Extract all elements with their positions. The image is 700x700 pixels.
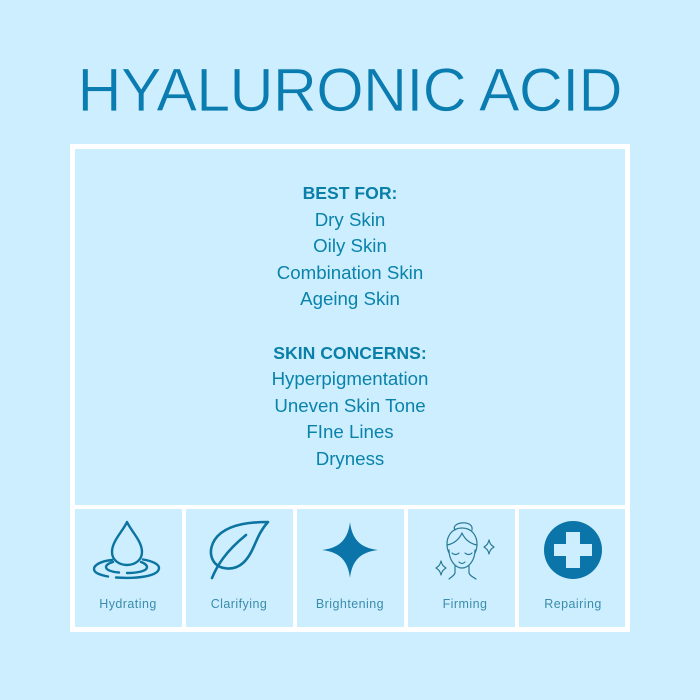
title: HYALURONIC ACID: [78, 56, 622, 124]
text block: best for: Dry Skin: [315, 208, 385, 230]
panel: main frame: [70, 144, 630, 632]
text block: best for: [277, 183, 423, 309]
text block: skin concerns: Dryness: [316, 448, 384, 468]
text block: skin concerns: FIne Lines: [306, 421, 394, 442]
text block: skin concerns: SKIN CONCERNS:: [273, 342, 427, 362]
label: brightening: Brightening: [316, 597, 384, 611]
text block: skin concerns: Uneven Skin Tone: [274, 394, 426, 416]
text block: skin concerns: Hyperpigmentation: [272, 368, 428, 389]
text block: best for: Combination Skin: [277, 262, 423, 282]
icon: medical cross: [544, 521, 602, 579]
icon: water drop: [92, 520, 160, 580]
label: firming: Firming: [443, 597, 487, 611]
text block: skin concerns: [272, 342, 428, 469]
icon: four point star: [322, 522, 378, 578]
label: repairing: Repairing: [544, 597, 602, 611]
text block: best for: BEST FOR:: [303, 183, 397, 203]
text block: best for: Ageing Skin: [300, 288, 400, 309]
divider: above icon row: [75, 505, 625, 509]
icon: face with sparkles: [435, 522, 495, 580]
label: clarifying: Clarifying: [211, 597, 267, 611]
icon: leaf: [210, 520, 270, 580]
label: hydrating: Hydrating: [99, 597, 157, 611]
text block: best for: Oily Skin: [313, 235, 387, 256]
